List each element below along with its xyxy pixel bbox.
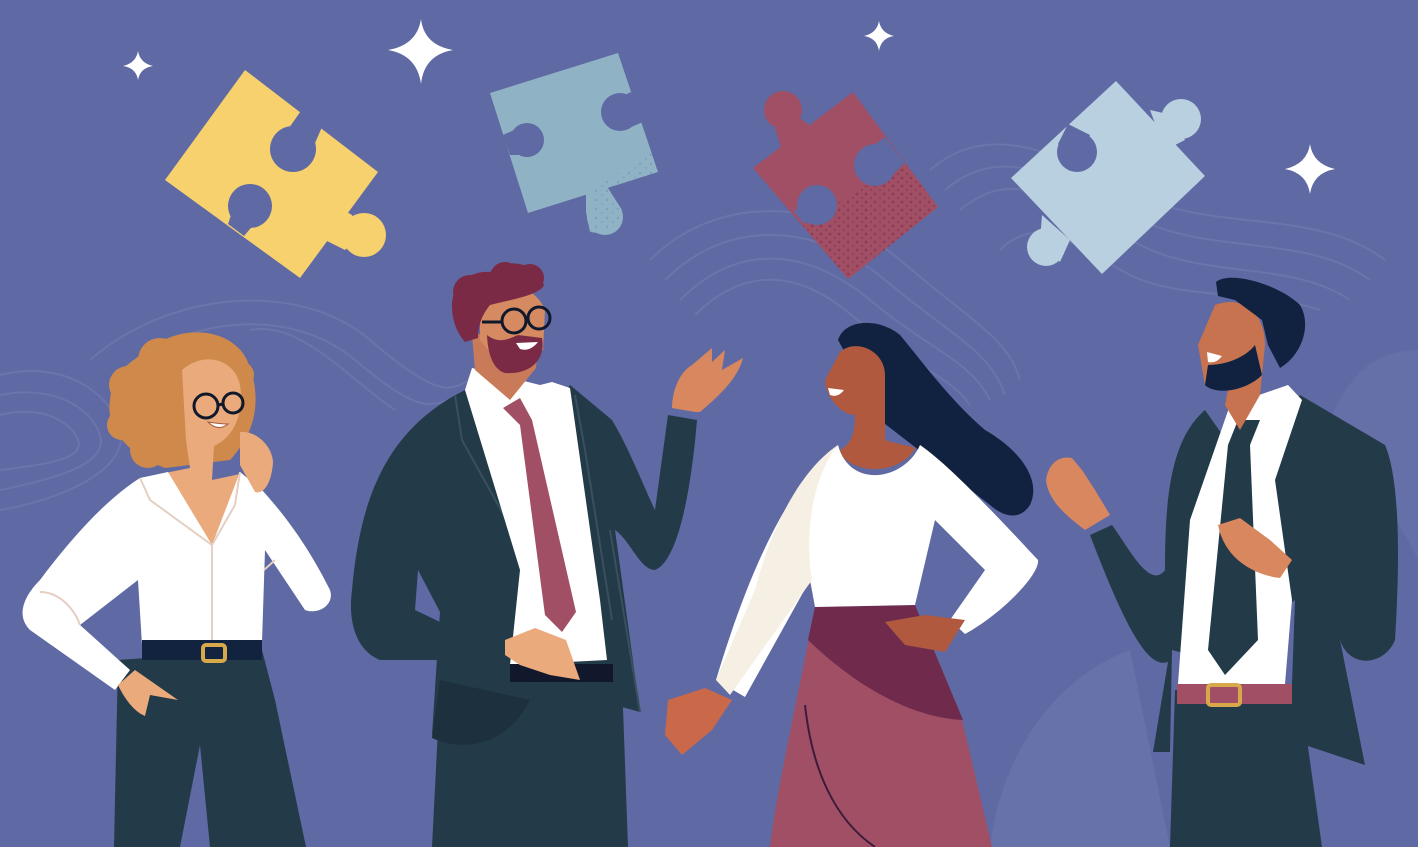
glasses <box>194 393 243 418</box>
tie <box>1208 420 1260 675</box>
jacket <box>1090 395 1398 765</box>
hair <box>1216 278 1305 368</box>
jacket lapels <box>455 395 640 712</box>
top <box>716 445 1038 697</box>
skirt fold <box>805 705 875 847</box>
person: man with glasses and red hair <box>351 262 743 847</box>
mouth <box>516 342 538 350</box>
belt <box>142 640 262 660</box>
trousers <box>432 680 628 847</box>
neck and head <box>1198 302 1265 430</box>
open hand left <box>1046 457 1110 530</box>
skirt <box>770 620 992 847</box>
puzzle piece: teal <box>490 53 658 235</box>
raised hand <box>672 348 743 412</box>
head and neck <box>825 346 915 469</box>
open hand chest <box>1218 518 1292 578</box>
blouse creases <box>40 472 275 640</box>
shirt <box>465 368 607 665</box>
puzzle piece: maroon <box>753 91 938 279</box>
waist sash <box>808 605 963 720</box>
neck and face <box>160 359 241 545</box>
smile <box>208 422 228 428</box>
long hair <box>838 323 1033 516</box>
suit jacket <box>351 385 697 740</box>
neck and head <box>472 325 540 400</box>
trousers <box>1170 690 1322 847</box>
shirt <box>1178 385 1302 684</box>
person: man with dark beard <box>1046 278 1398 847</box>
lower hand <box>665 688 732 755</box>
beard <box>487 335 543 373</box>
trousers <box>114 650 306 847</box>
smile <box>828 388 844 396</box>
hair <box>452 262 544 342</box>
lower hand <box>505 628 580 680</box>
beard <box>1205 345 1262 391</box>
puzzle piece: yellow <box>165 70 386 278</box>
glasses <box>482 307 550 333</box>
belt <box>1177 684 1292 704</box>
person: woman with long dark hair <box>665 323 1038 847</box>
person: woman with curly hair <box>23 332 331 847</box>
tie <box>503 398 576 632</box>
belt <box>510 664 613 682</box>
hands <box>240 432 273 492</box>
mouth <box>1207 352 1222 362</box>
blouse <box>23 472 331 690</box>
hair <box>107 332 256 468</box>
puzzle piece: light blue <box>1011 81 1205 274</box>
sparkle stars <box>123 19 1335 194</box>
hand on hip <box>885 615 965 652</box>
